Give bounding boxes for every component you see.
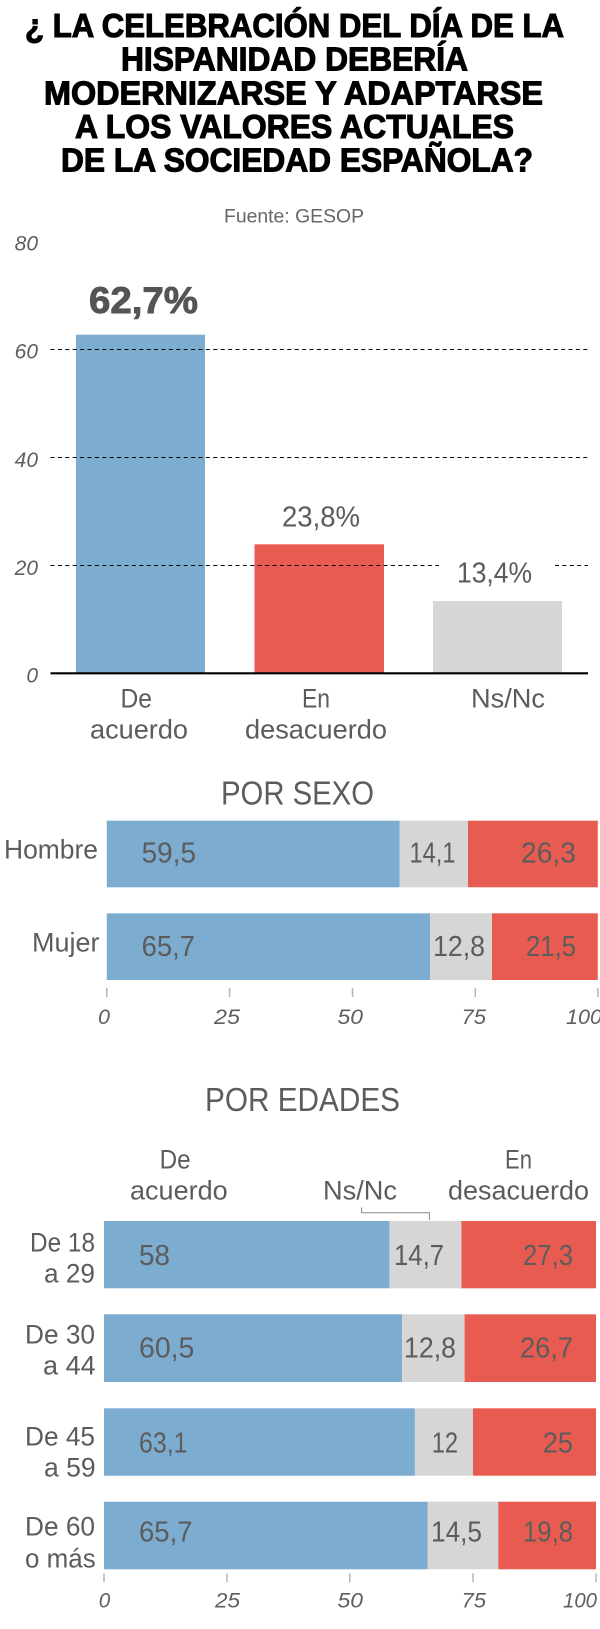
- row: De 60 o más: o más: [25, 1544, 96, 1574]
- row: De 18 a 29: a 29: [44, 1259, 95, 1289]
- legend: En desacuerdo: En: [505, 1144, 532, 1174]
- category: Ns/Nc: Ns/Nc: [471, 683, 545, 713]
- row: De 45 a 59: a 59: [44, 1453, 96, 1483]
- x axis: por edades: 50: [338, 1590, 363, 1613]
- row: De 18 a 29: 14,7: [394, 1240, 444, 1272]
- title: HISPANIDAD DEBERÍA: [121, 41, 468, 78]
- row: De 60 o más: [25, 1502, 596, 1574]
- row: Mujer: [32, 913, 598, 980]
- category: De acuerdo: [90, 683, 188, 744]
- x axis: por sexo: 50: [338, 1006, 363, 1029]
- row: Mujer: 21,5: [526, 931, 576, 963]
- heading: por sexo: POR SEXO: [221, 774, 374, 811]
- row: De 18 a 29: 27,3: [523, 1240, 573, 1272]
- category: En desacuerdo: [245, 683, 387, 744]
- value: 62,7%: 62,7%: [89, 280, 198, 321]
- legend: En desacuerdo: [448, 1144, 589, 1205]
- source note: Fuente: GESOP: [224, 207, 364, 228]
- legend: De acuerdo: acuerdo: [130, 1175, 228, 1205]
- row: De 45 a 59: 25: [543, 1427, 573, 1459]
- row: De 60 o más: 19,8: [523, 1517, 573, 1549]
- title: DE LA SOCIEDAD ESPAÑOLA?: [61, 141, 533, 178]
- row: De 60 o más: 65,7: [139, 1517, 192, 1549]
- legend: De acuerdo: [130, 1144, 228, 1205]
- x axis: por sexo: 75: [462, 1006, 486, 1029]
- category: De acuerdo: De: [120, 683, 152, 713]
- y axis labels: 0: [26, 665, 38, 688]
- x axis: por edades: 25: [214, 1590, 240, 1613]
- row: De 45 a 59: De 45: [25, 1422, 95, 1452]
- title: A LOS VALORES ACTUALES: [75, 108, 514, 145]
- row: De 30 a 44: 60,5: [139, 1332, 194, 1364]
- row: De 30 a 44: 26,7: [520, 1332, 573, 1364]
- x axis: por sexo: 25: [213, 1006, 240, 1029]
- x axis: por edades: [99, 1573, 597, 1613]
- x axis: por edades: 0: [99, 1590, 111, 1613]
- value: 23,8%: 23,8%: [282, 502, 360, 534]
- x axis: por edades: 75: [462, 1590, 486, 1613]
- column chart: overall result: [14, 233, 588, 744]
- title: [25, 7, 564, 178]
- bar: En desacuerdo: [254, 544, 384, 673]
- row: Mujer: 12,8: [433, 931, 485, 963]
- bar: Ns/Nc: [433, 601, 562, 673]
- row: Hombre: [4, 821, 598, 887]
- row: De 45 a 59: 12: [432, 1427, 458, 1459]
- row: De 30 a 44: 12,8: [404, 1332, 456, 1364]
- y axis labels: 80: [15, 233, 38, 256]
- row: Hombre: 59,5: [142, 838, 196, 870]
- legend: Ns/Nc with bracket: [323, 1175, 429, 1220]
- row: De 18 a 29: 58: [139, 1240, 170, 1272]
- row: De 45 a 59: 63,1: [139, 1427, 188, 1459]
- x axis: por edades: 100: [563, 1590, 597, 1613]
- row: Hombre: 14,1: [410, 838, 456, 870]
- y axis labels: 20: [14, 557, 38, 580]
- y axis labels: 40: [15, 449, 38, 472]
- category: De acuerdo: acuerdo: [90, 714, 188, 744]
- heading: por edades: POR EDADES: [205, 1081, 400, 1118]
- bar: De acuerdo: [76, 335, 205, 673]
- title: ¿ LA CELEBRACIÓN DEL DÍA DE LA: [25, 7, 564, 44]
- row: De 60 o más: De 60: [25, 1512, 95, 1542]
- x axis: por sexo: 100: [566, 1006, 600, 1029]
- x axis: por sexo: [98, 988, 600, 1029]
- row: Mujer: 65,7: [142, 931, 195, 963]
- row: Hombre: 26,3: [521, 838, 576, 870]
- row: De 18 a 29: [30, 1221, 596, 1289]
- legend: En desacuerdo: desacuerdo: [448, 1175, 589, 1205]
- title: MODERNIZARSE Y ADAPTARSE: [44, 75, 543, 112]
- category: En desacuerdo: desacuerdo: [245, 714, 387, 744]
- y axis labels: 60: [15, 340, 38, 363]
- stacked bars: por sexo: [4, 821, 600, 1029]
- x axis: por sexo: 0: [98, 1006, 110, 1029]
- row: Mujer: Mujer: [32, 928, 100, 958]
- y axis labels: [14, 233, 38, 688]
- row: De 60 o más: 14,5: [431, 1517, 482, 1549]
- legend: Ns/Nc with bracket: Ns/Nc: [323, 1175, 397, 1205]
- row: De 30 a 44: [25, 1314, 596, 1382]
- row: De 18 a 29: De 18: [30, 1228, 95, 1258]
- row: Hombre: Hombre: [4, 834, 98, 864]
- category: En desacuerdo: En: [302, 683, 330, 713]
- row: De 30 a 44: a 44: [43, 1350, 96, 1380]
- row: De 30 a 44: De 30: [25, 1319, 95, 1349]
- value: 13,4%: 13,4%: [457, 558, 532, 590]
- legend: De acuerdo: De: [160, 1144, 191, 1174]
- stacked bars: por edades: [25, 1221, 597, 1613]
- row: De 45 a 59: [25, 1408, 596, 1483]
